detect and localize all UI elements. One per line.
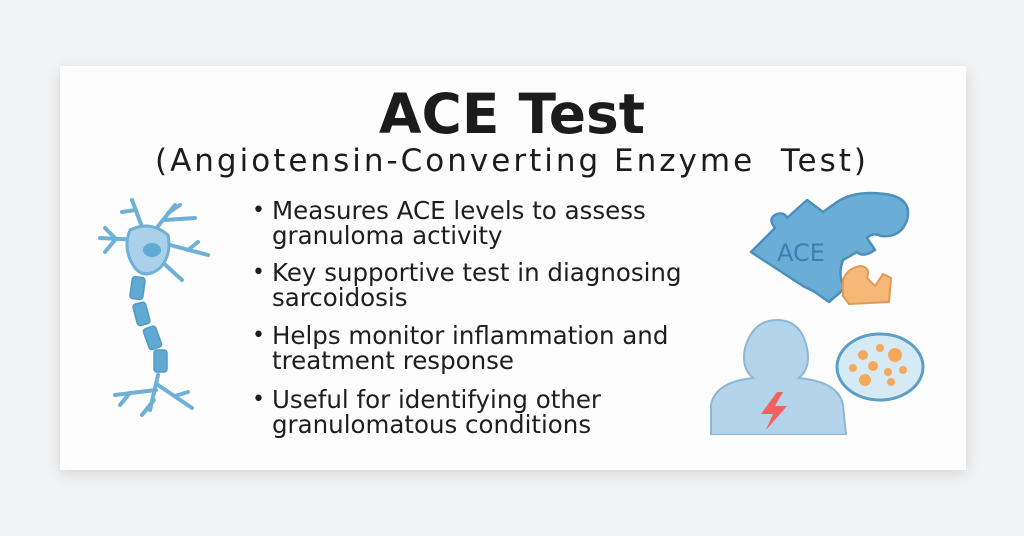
bullet list [252,196,682,439]
bullet 4: Useful for identifying other [272,385,601,414]
bullet 3: • [252,323,265,348]
bullet 3: Helps monitor inflammation and [272,321,668,350]
bullet 2: Key supportive test in diagnosing [272,258,682,287]
icon: human body with lightning [710,319,847,435]
bullet 1 [252,196,646,250]
bullet 2 [252,258,682,312]
title: ACE Test [379,82,645,146]
card panel [60,66,966,470]
bullet 1: • [252,198,265,223]
icon: neuron [98,198,210,418]
bullet 1: Measures ACE levels to assess [272,196,646,225]
bullet 4: granulomatous conditions [272,410,591,439]
icon: ACE puzzle piece: ACE [777,239,825,267]
bullet 4: • [252,387,265,412]
bullet 1: granuloma activity [272,221,502,250]
bullet 2: • [252,260,265,285]
icon: cell with granules [836,332,924,402]
bullet 3 [252,321,668,375]
bullet 3: treatment response [272,346,514,375]
bullet 4 [252,385,601,439]
bullet 2: sarcoidosis [272,283,407,312]
icon: ACE puzzle piece [750,192,910,305]
subtitle: (Angiotensin-Converting Enzyme Test) [155,143,869,179]
